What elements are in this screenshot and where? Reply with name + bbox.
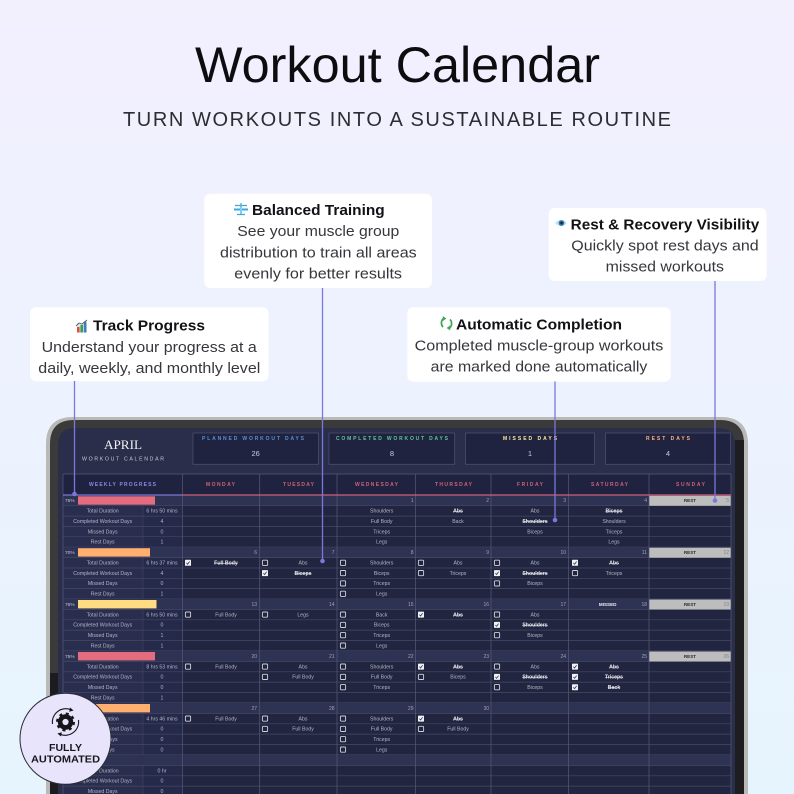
week 2 row: Legs: [376, 592, 388, 598]
week 3 row: Shoulders: [522, 623, 548, 629]
week 2 row: Triceps: [373, 581, 391, 587]
badge: fully automated: FULLY: [49, 742, 82, 754]
summary card: planned workout days: [193, 433, 318, 464]
title: Workout Calendar: [195, 37, 600, 93]
week 1 row: 2: [486, 498, 489, 504]
week 4 row: 21: [329, 654, 335, 660]
callout: balanced training: See your muscle group: [237, 223, 399, 240]
week 2 row: Missed Days: [88, 581, 118, 587]
week 5 row: Completed Workout Days: [73, 727, 133, 733]
week 4 row: 25: [641, 654, 647, 660]
summary card: rest days: 4: [666, 449, 670, 458]
callout: balanced training: evenly for better results: [234, 266, 402, 283]
week 4 row: 23: [483, 654, 489, 660]
calendar header row: WEDNESDAY: [355, 482, 399, 488]
week 1 row: 4: [644, 498, 647, 504]
week 4 row: 26: [723, 654, 729, 660]
icon: green refresh arrows: [441, 316, 452, 330]
week 3 row: 6 hrs 50 mins: [146, 612, 178, 618]
callout: rest and recovery visibility: Quickly spot rest days and: [571, 238, 759, 255]
callout: balanced training: [204, 194, 432, 288]
week 4 row: Abs: [453, 664, 463, 670]
week 2 row: Abs: [454, 561, 463, 567]
summary card: planned workout days: PLANNED WORKOUT DAYS: [202, 436, 305, 442]
week 4 row: Total Duration: [87, 664, 119, 670]
week 5 row: Abs: [453, 716, 463, 722]
week 2 row: 9: [486, 550, 489, 556]
week 5 row: Full Body: [447, 727, 469, 733]
week 2 row: 70%: [65, 550, 75, 556]
week 4 row: Back: [608, 685, 620, 691]
week 2 row: 7: [332, 550, 335, 556]
week 1 row: Rest Days: [91, 540, 115, 546]
week 2 row: Triceps: [606, 571, 623, 577]
week 4 row: Full Body: [371, 675, 393, 681]
week 1 row: Total Duration: [87, 509, 119, 515]
week 3 row: 18: [641, 602, 647, 608]
week 6 row: Completed Workout Days: [73, 779, 133, 785]
week 4 row: Abs: [299, 664, 308, 670]
callout: track progress: Understand your progress at a: [42, 339, 257, 356]
month heading: APRIL: [104, 437, 142, 452]
callout: balanced training: distribution to train all areas: [220, 244, 417, 262]
week 1 row: Shoulders: [370, 509, 394, 515]
week 3 row: Abs: [453, 612, 463, 618]
week 4 row: Rest Days: [91, 695, 115, 701]
week 4 row: 0: [161, 675, 164, 681]
week 1 row: 75%: [65, 498, 75, 504]
week 3 row: 0: [161, 623, 164, 629]
calendar header row: FRIDAY: [517, 482, 544, 488]
week 1 row: Shoulders: [602, 519, 626, 525]
week 3 row: 13: [251, 602, 257, 608]
week 1 row: Abs: [531, 509, 540, 515]
week 2 row: 0: [161, 581, 164, 587]
week 3 row: 17: [560, 602, 566, 608]
week 5 row: Triceps: [373, 737, 391, 743]
week 2 row: 6 hrs 37 mins: [146, 561, 178, 567]
week 4 row: 75%: [65, 654, 75, 660]
week 3 row: 1: [161, 643, 164, 649]
week 5 row: Legs: [376, 747, 388, 753]
summary card: completed workout days: [329, 433, 455, 464]
week 1 row: Shoulders: [522, 519, 548, 525]
week 3 row: 19: [723, 602, 729, 608]
week 4 row: REST: [684, 654, 696, 659]
week 1 row: REST: [684, 498, 696, 503]
week 2 row: 6: [254, 550, 257, 556]
week 1 row: Triceps: [373, 529, 391, 535]
week 3 row: 16: [483, 602, 489, 608]
subtitle: TURN WORKOUTS INTO A SUSTAINABLE ROUTINE: [123, 109, 671, 131]
week 1 row: 3: [563, 498, 566, 504]
callout: track progress: Track Progress: [93, 318, 205, 335]
week 3 row: Legs: [376, 643, 388, 649]
week 3 row: Completed Workout Days: [73, 623, 133, 629]
icon: balance scale: [234, 203, 248, 214]
week 3 row: [63, 599, 731, 651]
week 1 row: Back: [452, 519, 464, 525]
week 2 row: Biceps: [294, 571, 312, 577]
week 1 row: Abs: [453, 509, 463, 515]
week 3 row: Abs: [531, 612, 540, 618]
week 2 row: Abs: [531, 561, 540, 567]
week 5 row: Full Body: [215, 716, 237, 722]
week 1 row: Biceps: [527, 529, 543, 535]
callout: automatic completion: Automatic Completion: [456, 316, 622, 333]
week 1 row: 6 hrs 50 mins: [146, 509, 178, 515]
week 4 row: Full Body: [215, 664, 237, 670]
callout: track progress: daily, weekly, and monthly level: [38, 360, 260, 377]
week 2 row: Triceps: [450, 571, 467, 577]
week 2 row: Shoulders: [370, 561, 394, 567]
week 1 row: 1: [161, 540, 164, 546]
week 4 row: 8 hrs 53 mins: [146, 664, 178, 670]
week 1 row: Triceps: [606, 529, 623, 535]
week 3 row: Rest Days: [91, 643, 115, 649]
badge: fully automated: [20, 693, 111, 784]
week 3 row: REST: [684, 602, 696, 607]
week 5 row: 4 hrs 46 mins: [146, 716, 178, 722]
week 2 row: Biceps: [527, 581, 543, 587]
calendar header row: THURSDAY: [435, 482, 473, 488]
week 2 row: Rest Days: [91, 592, 115, 598]
week 1 row: Legs: [376, 540, 388, 546]
summary card: rest days: REST DAYS: [646, 436, 691, 442]
week 5 row: 28: [329, 706, 335, 712]
week 4 row: Full Body: [292, 675, 314, 681]
badge: fully automated: AUTOMATED: [31, 754, 100, 766]
week 4 row: Shoulders: [370, 664, 394, 670]
week 5 row: [63, 703, 731, 755]
calendar header row: SUNDAY: [676, 482, 706, 488]
tablet device with calendar screen: [46, 417, 748, 794]
week 1 row: Biceps: [605, 509, 623, 515]
week 1 row: Legs: [608, 540, 620, 546]
week 2 row: Shoulders: [522, 571, 548, 577]
week 5 row: 30: [483, 706, 489, 712]
week 3 row: Triceps: [373, 633, 391, 639]
week 5 row: 70%: [65, 706, 75, 712]
week 5 row: Shoulders: [370, 716, 394, 722]
week 5 row: 29: [408, 706, 414, 712]
week 6 row: Total Duration: [87, 768, 119, 774]
week 1 row: Completed Workout Days: [73, 519, 133, 525]
week 3 row: Legs: [297, 612, 309, 618]
week 2 row: 10: [560, 550, 566, 556]
week 5 row: Full Body: [292, 727, 314, 733]
week 1 row: 1: [411, 498, 414, 504]
week 1 row: Full Body: [371, 519, 393, 525]
week 4 row: Abs: [531, 664, 540, 670]
week 2 row: Completed Workout Days: [73, 571, 133, 577]
week 4 row: Abs: [609, 664, 619, 670]
week 5 row: 27: [251, 706, 257, 712]
week 1 row: 5: [726, 498, 729, 504]
week 3 row: 15: [408, 602, 414, 608]
summary card: planned workout days: 26: [252, 449, 260, 458]
week 1 row: Missed Days: [88, 529, 118, 535]
week 6 row: [63, 755, 731, 794]
week 2 row: Biceps: [374, 571, 390, 577]
week 5 row: 0: [161, 747, 164, 753]
week 3 row: Missed Days: [88, 633, 118, 639]
summary card: missed days: MISSED DAYS: [503, 436, 558, 442]
summary card: missed days: 1: [528, 449, 532, 458]
week 3 row: Biceps: [527, 633, 543, 639]
callout: track progress: [30, 307, 268, 381]
calendar header row: WEEKLY PROGRESS: [89, 482, 157, 488]
connector: balanced training: [320, 288, 325, 563]
calendar header row: SATURDAY: [591, 482, 629, 488]
week 2 row: 11: [642, 550, 647, 556]
callout: automatic completion: are marked done automatically: [431, 359, 648, 376]
week 4 row: [63, 651, 731, 703]
callout: automatic completion: Completed muscle-group workouts: [415, 338, 663, 355]
week 3 row: Biceps: [374, 623, 390, 629]
week 4 row: 22: [408, 654, 414, 660]
week 5 row: Full Body: [371, 727, 393, 733]
month heading: WORKOUT CALENDAR: [82, 457, 164, 463]
icon: eye: [555, 220, 567, 226]
summary card: rest days: [606, 433, 730, 464]
week 3 row: MISSED: [599, 602, 617, 607]
week 4 row: Biceps: [527, 685, 543, 691]
summary card: missed days: [466, 433, 594, 464]
week 4 row: Biceps: [450, 675, 466, 681]
calendar header row: TUESDAY: [283, 482, 315, 488]
week 2 row: 12: [723, 550, 729, 556]
week 2 row: 8: [411, 550, 414, 556]
connector: rest and recovery: [713, 281, 717, 503]
week 6 row: 0 hr: [158, 768, 167, 774]
calendar header row: MONDAY: [206, 482, 236, 488]
week 2 row: Abs: [609, 561, 619, 567]
calendar header row: [63, 474, 731, 495]
callout: balanced training: Balanced Training: [252, 202, 385, 219]
week 4 row: 0: [161, 685, 164, 691]
callout: automatic completion: [407, 307, 671, 382]
callout: rest and recovery visibility: missed workouts: [606, 259, 724, 276]
icon: bar chart: [76, 320, 87, 332]
week 3 row: 76%: [65, 602, 75, 608]
week 4 row: Triceps: [605, 675, 623, 681]
week 4 row: Completed Workout Days: [73, 675, 133, 681]
week 2 row: 1: [161, 592, 164, 598]
connector: track progress: [72, 381, 77, 496]
week 2 row: 4: [161, 571, 164, 577]
week 5 row: 0: [161, 737, 164, 743]
week 1 row: [63, 495, 731, 547]
week 5 row: 0: [161, 727, 164, 733]
week 4 row: 1: [161, 695, 164, 701]
week 2 row: Abs: [299, 561, 308, 567]
month heading: [82, 437, 164, 463]
week 4 row: Triceps: [373, 685, 391, 691]
week 2 row: REST: [684, 550, 696, 555]
week 1 row: 0: [161, 529, 164, 535]
callout: rest and recovery visibility: Rest & Recovery Visibility: [571, 216, 760, 233]
week 3 row: Full Body: [215, 612, 237, 618]
week 3 row: Total Duration: [87, 612, 119, 618]
week 3 row: 14: [329, 602, 335, 608]
week 2 row: [63, 547, 731, 599]
summary card: completed workout days: 8: [390, 449, 394, 458]
week 3 row: Back: [376, 612, 388, 618]
week 2 row: Total Duration: [87, 561, 119, 567]
week 1 row: 4: [161, 519, 164, 525]
summary card: completed workout days: COMPLETED WORKOUT DAYS: [336, 436, 449, 442]
week 5 row: Rest Days: [91, 747, 115, 753]
week 4 row: Missed Days: [88, 685, 118, 691]
connector: automatic completion: [553, 382, 557, 522]
icon: gear with rotating arrows: [52, 708, 79, 736]
week 4 row: 20: [251, 654, 257, 660]
week 5 row: Missed Days: [88, 737, 118, 743]
week 4 row: 24: [560, 654, 566, 660]
week 6 row: 0: [161, 779, 164, 785]
week 5 row: Total Duration: [87, 716, 119, 722]
week 3 row: 1: [161, 633, 164, 639]
week 4 row: Shoulders: [522, 675, 548, 681]
week 5 row: Abs: [299, 716, 308, 722]
week 2 row: Full Body: [214, 561, 238, 567]
callout: rest and recovery visibility: [549, 208, 767, 281]
